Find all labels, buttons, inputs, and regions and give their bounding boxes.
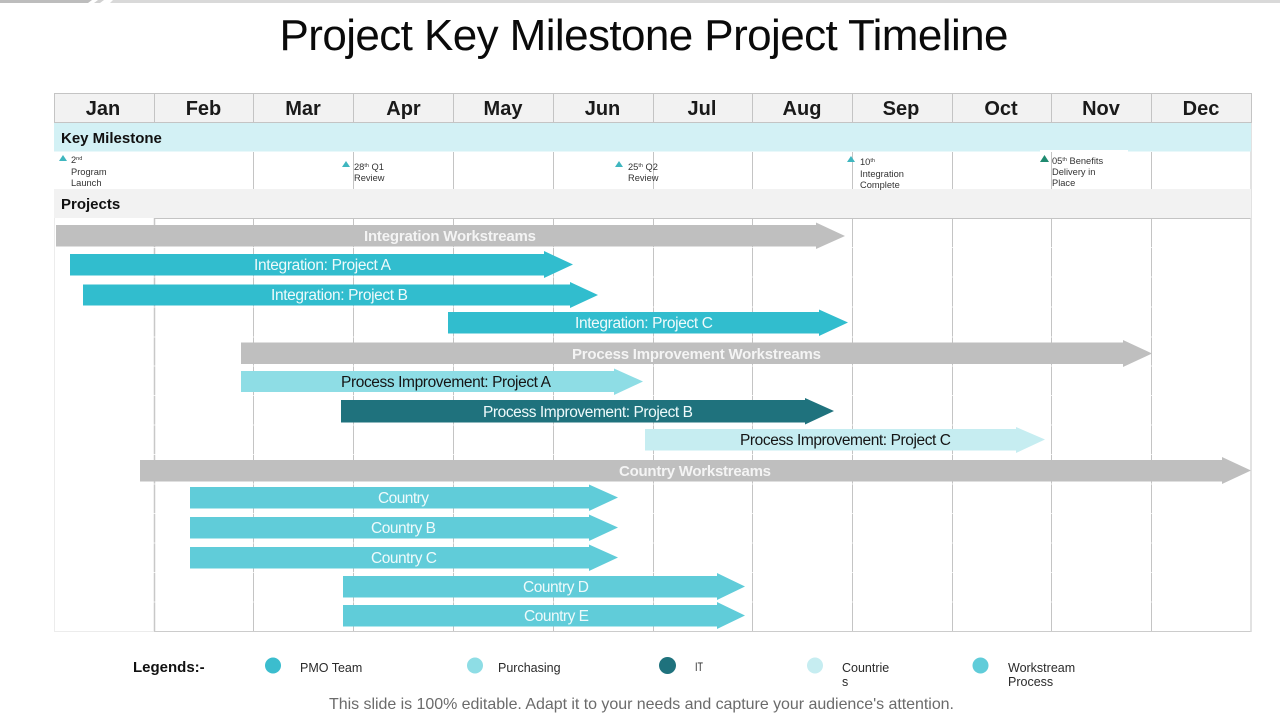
month header row: May bbox=[484, 98, 523, 120]
milestone: integration complete: Integration bbox=[860, 169, 904, 179]
milestone: program launch bbox=[59, 155, 107, 188]
arrow: integration project C: Integration: Project C bbox=[575, 315, 713, 332]
milestone: Q1 review: Review bbox=[354, 173, 385, 183]
arrow: integration workstreams bbox=[56, 222, 845, 249]
arrow: integration project A bbox=[70, 251, 573, 278]
milestone: integration complete: Complete bbox=[860, 180, 900, 190]
arrow: process improvement project C bbox=[645, 427, 1045, 453]
milestone: Q1 review bbox=[342, 161, 385, 183]
milestone: benefits delivery: Benefits bbox=[1067, 156, 1103, 166]
milestone: program launch: Launch bbox=[71, 178, 102, 188]
legend item: IT bbox=[659, 657, 703, 674]
grid lines bbox=[54, 123, 1251, 632]
top decorative bar bbox=[0, 0, 1280, 3]
month header row: Aug bbox=[783, 98, 821, 120]
projects band: Projects bbox=[61, 196, 120, 213]
timeline table bbox=[54, 94, 1252, 632]
arrow: country D bbox=[343, 573, 745, 600]
milestone: benefits delivery bbox=[1040, 150, 1128, 188]
legend: Legends:- bbox=[133, 659, 205, 676]
key milestone band: Key Milestone bbox=[61, 130, 162, 147]
legend item: countries bbox=[807, 658, 889, 689]
month header row: Jun bbox=[585, 98, 620, 120]
milestone: Q2 review: Q2 bbox=[643, 162, 658, 172]
arrow: process improvement project C: Process Improvement: Project C bbox=[740, 432, 951, 449]
milestone: benefits delivery: Delivery in bbox=[1052, 167, 1095, 177]
arrow: country: Country bbox=[378, 490, 429, 507]
arrow: integration project C bbox=[448, 310, 848, 336]
arrow: integration workstreams: Integration Workstreams bbox=[364, 228, 536, 245]
arrow: integration project B bbox=[83, 282, 598, 308]
milestone: integration complete: th bbox=[870, 158, 875, 164]
milestone: integration complete bbox=[847, 156, 904, 190]
milestone: integration complete: 10 bbox=[860, 157, 870, 167]
milestone: Q1 review: 28 bbox=[354, 162, 364, 172]
legend item: purchasing: Purchasing bbox=[498, 661, 561, 675]
legend item: PMO team: PMO Team bbox=[300, 661, 362, 675]
arrow: country workstreams bbox=[140, 457, 1251, 484]
arrow: process improvement workstreams bbox=[241, 340, 1152, 367]
title: Project Key Milestone Project Timeline bbox=[280, 11, 1008, 60]
legend item: workstream process bbox=[972, 658, 1075, 689]
arrow: process improvement project B: Process Improvement: Project B bbox=[483, 404, 693, 421]
milestone: Q1 review: Q1 bbox=[369, 162, 384, 172]
arrow: process improvement workstreams: Process Improvement Workstreams bbox=[572, 346, 821, 363]
milestone: Q1 review: th bbox=[364, 163, 369, 169]
month header row: Dec bbox=[1183, 98, 1219, 120]
month header row: Nov bbox=[1082, 98, 1121, 120]
key milestone band bbox=[54, 123, 1251, 152]
milestone: benefits delivery: 05 bbox=[1052, 156, 1062, 166]
milestone: program launch: Program bbox=[71, 167, 107, 177]
legend item: countries: s bbox=[842, 675, 848, 689]
milestone: Q2 review: Review bbox=[628, 173, 659, 183]
projects band bbox=[54, 189, 1251, 218]
arrow: process improvement project B bbox=[341, 398, 834, 424]
milestone: benefits delivery: Place bbox=[1052, 178, 1075, 188]
legend item: countries: Countrie bbox=[842, 661, 889, 675]
milestone: Q2 review: th bbox=[638, 163, 643, 169]
arrow: country C bbox=[190, 544, 618, 571]
milestone: Q2 review bbox=[615, 161, 659, 183]
arrow: country C: Country C bbox=[371, 550, 437, 567]
milestone: program launch: nd bbox=[76, 156, 82, 162]
legend item: purchasing bbox=[467, 658, 561, 675]
month header row: Feb bbox=[186, 98, 221, 120]
arrow: country workstreams: Country Workstreams bbox=[619, 463, 771, 480]
month header row: Oct bbox=[984, 98, 1018, 120]
legend bbox=[133, 657, 1075, 689]
arrow: process improvement project A: Process Improvement: Project A bbox=[341, 374, 552, 391]
arrow: integration project B: Integration: Project B bbox=[271, 287, 408, 304]
month header row: Apr bbox=[386, 98, 421, 120]
milestone: program launch: 2 bbox=[71, 155, 76, 165]
arrow: integration project A: Integration: Project A bbox=[254, 257, 392, 274]
legend item: workstream process: Workstream bbox=[1008, 661, 1075, 675]
footer note: This slide is 100% editable. Adapt it to your needs and capture your audience's attention. bbox=[329, 696, 954, 713]
month header row: Mar bbox=[285, 98, 321, 120]
arrow: process improvement project A bbox=[241, 368, 643, 395]
arrow: country E: Country E bbox=[524, 608, 589, 625]
milestone: Q2 review: 25 bbox=[628, 162, 638, 172]
month header row: Jan bbox=[86, 98, 120, 120]
month header row: Jul bbox=[688, 98, 716, 120]
legend item: IT: IT bbox=[695, 662, 703, 674]
arrow: country B: Country B bbox=[371, 520, 436, 537]
arrow: country D: Country D bbox=[523, 579, 589, 596]
arrow: country bbox=[190, 484, 618, 511]
legend item: workstream process: Process bbox=[1008, 675, 1053, 689]
month header row bbox=[54, 94, 1252, 122]
month header row: Sep bbox=[883, 98, 919, 120]
arrow: country E bbox=[343, 602, 745, 629]
milestone: benefits delivery: th bbox=[1062, 157, 1067, 163]
arrow: country B bbox=[190, 514, 618, 541]
legend item: PMO team bbox=[265, 658, 362, 675]
